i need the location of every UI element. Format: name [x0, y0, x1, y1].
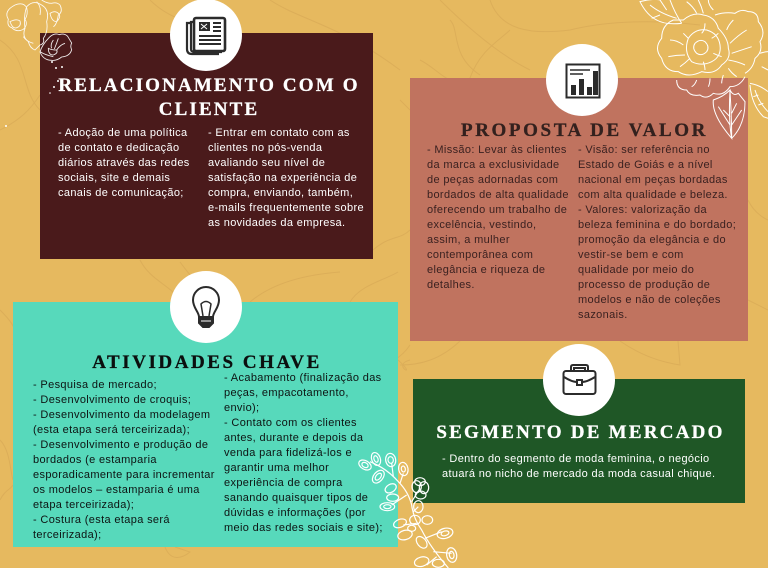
text: visão e valores: modelos e não de coleções [578, 294, 721, 306]
text: missão: assim, a mulher [427, 234, 510, 246]
text: coluna direita: venda para fidelizá-los e [224, 447, 352, 459]
text: coluna direita: compra, enviando, também, [208, 187, 353, 199]
icon circle: light bulb [170, 271, 242, 343]
text: coluna direita: clientes no pós-venda [208, 142, 322, 154]
text: visão e valores: com alta qualidade e beleza. [578, 189, 728, 201]
text: visão e valores: Estado de Goiás e a nível [578, 159, 713, 171]
text: missão: excelência, vestindo, [427, 219, 536, 231]
text: coluna direita: - Entrar em contato com as [208, 127, 350, 139]
text: coluna esquerda: - Costura (esta etapa será [33, 514, 170, 526]
text: coluna esquerda: - Desenvolvimento de croquis; [33, 394, 191, 406]
text: coluna direita [208, 127, 364, 229]
decoration: flower top right [639, 0, 768, 140]
text: coluna esquerda: - Adoção de uma política [58, 127, 187, 139]
text: visão e valores [578, 144, 736, 321]
panel: proposta de valor [410, 78, 748, 341]
text: missão: elegância e riqueza de [427, 264, 545, 276]
text: missão: detalhes. [427, 279, 475, 291]
text: missão: bordados de alta qualidade [427, 189, 569, 201]
text: segmento: atuará no nicho de mercado da moda casual chique. [442, 468, 715, 480]
text: missão: da marca a exclusividade [427, 159, 560, 171]
text: coluna esquerda: esporadicamente para incrementar [33, 469, 215, 481]
text: coluna direita: as novidades da empresa. [208, 217, 345, 229]
text: coluna esquerda: - Pesquisa de mercado; [33, 379, 157, 391]
text: coluna esquerda: etapa terceirizada); [33, 499, 134, 511]
heading: relacionamento com o cliente: RELACIONAMENTO COM O [58, 75, 360, 96]
text: coluna direita: dúvidas e informações (por [224, 507, 366, 519]
decoration: flower branch bottom [358, 452, 458, 568]
icon circle: briefcase [543, 344, 615, 416]
text: missão: oferecendo um trabalho de [427, 204, 567, 216]
text: coluna esquerda: - Desenvolvimento da modelagem [33, 409, 210, 421]
text: coluna esquerda [33, 379, 215, 541]
text: missão: de peças adornadas com [427, 174, 558, 186]
text: coluna direita: meio das redes sociais e site); [224, 522, 383, 534]
heading: relacionamento com o cliente [58, 75, 360, 120]
text: coluna esquerda [58, 127, 190, 199]
text: coluna direita: garantir uma melhor [224, 462, 329, 474]
decoration: dots near heading [5, 61, 63, 127]
text: coluna esquerda: os modelos – estamparia é uma [33, 484, 200, 496]
text: missão: contemporânea com [427, 249, 533, 261]
text: visão e valores: beleza feminina e do bordado; [578, 219, 736, 231]
text: visão e valores: sazonais. [578, 309, 628, 321]
text: coluna esquerda: - Desenvolvimento e produção de [33, 439, 208, 451]
text: visão e valores: - Visão: ser referência no [578, 144, 710, 156]
heading: relacionamento com o cliente: CLIENTE [159, 99, 259, 120]
text: coluna direita: satisfação na experiência de [208, 172, 357, 184]
heading: segmento de mercado: SEGMENTO DE MERCADO [436, 422, 725, 443]
text: coluna direita: - Contato com os clientes [224, 417, 357, 429]
text: coluna direita: e-mails frequentemente sobre [208, 202, 364, 214]
text: coluna direita: antes, durante e depois da [224, 432, 363, 444]
text: segmento [442, 453, 715, 480]
text: coluna direita: - Acabamento (finalização das [224, 372, 382, 384]
text: coluna esquerda: bordados (e estamparia [33, 454, 157, 466]
icon circle: bar chart report [546, 44, 618, 116]
panel: relacionamento com o cliente [40, 33, 373, 259]
text: coluna esquerda: de contato e dedicação [58, 142, 179, 154]
text: coluna esquerda: sociais, site e demais [58, 172, 170, 184]
text: missão: - Missão: Levar às clientes [427, 144, 567, 156]
text: segmento: - Dentro do segmento de moda feminina, o negócio [442, 453, 710, 465]
text: visão e valores: promoção da elegância e do [578, 234, 726, 246]
text: coluna esquerda: terceirizada); [33, 529, 101, 541]
panel: segmento de mercado [413, 379, 745, 503]
decoration: flower top left [6, 0, 72, 61]
text: coluna direita: envio); [224, 402, 259, 414]
text: coluna esquerda: diários através das redes [58, 157, 190, 169]
text: coluna esquerda: (esta etapa será terceirizada); [33, 424, 190, 436]
text: coluna esquerda: canais de comunicação; [58, 187, 184, 199]
text: visão e valores: processo de produção de [578, 279, 710, 291]
text: missão [427, 144, 569, 291]
text: visão e valores: vestir-se bem e com [578, 249, 684, 261]
text: coluna direita: peças, empacotamento, [224, 387, 349, 399]
text: coluna direita: avaliando seu nível de [208, 157, 325, 169]
heading: proposta de valor: PROPOSTA DE VALOR [461, 120, 708, 141]
text: coluna direita [224, 372, 383, 534]
text: coluna direita: experiência de compra [224, 477, 343, 489]
text: visão e valores: qualidade por meio do [578, 264, 694, 276]
panel: atividades chave [13, 302, 398, 547]
icon circle: newspaper [170, 0, 242, 71]
text: visão e valores: - Valores: valorização da [578, 204, 707, 216]
heading: atividades chave: ATIVIDADES CHAVE [92, 352, 322, 373]
text: coluna direita: sanando quaisquer tipos de [224, 492, 368, 504]
text: visão e valores: nacional em peças bordadas [578, 174, 728, 186]
